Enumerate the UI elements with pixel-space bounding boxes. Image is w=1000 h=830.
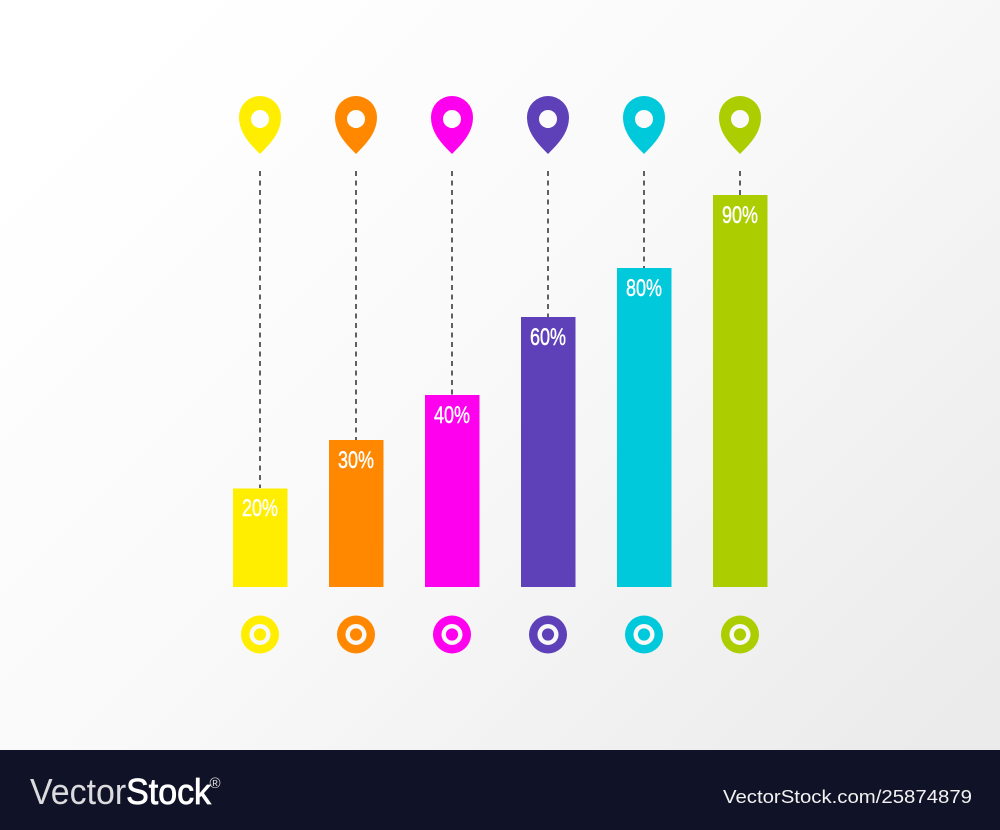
icon: green map pin (719, 96, 761, 154)
icon: purple target (529, 616, 567, 654)
bar (713, 195, 768, 587)
bar (329, 440, 384, 587)
footer image id: VectorStock.com/25874879 (723, 786, 972, 807)
bar (233, 488, 288, 587)
value label: 80% (626, 275, 662, 302)
column: 90% green (713, 96, 768, 654)
icon: purple map pin (527, 96, 569, 154)
icon: yellow map pin (239, 96, 281, 154)
bar (617, 268, 672, 587)
dashed connector (355, 171, 357, 440)
value label: 60% (530, 324, 566, 351)
value label: 30% (338, 447, 374, 474)
dashed connector (739, 171, 741, 195)
column: 80% cyan (617, 96, 672, 654)
icon: orange target (337, 616, 375, 654)
value label: 20% (242, 495, 278, 522)
bar (521, 317, 576, 587)
dashed connector (547, 171, 549, 317)
column: 40% magenta (425, 96, 480, 654)
footer band (0, 750, 1000, 830)
dashed connector (259, 171, 261, 488)
column: 30% orange (329, 96, 384, 654)
icon: cyan target (625, 616, 663, 654)
dashed connector (451, 171, 453, 395)
column: 20% yellow (233, 96, 288, 654)
value label: 40% (434, 402, 470, 429)
icon: green target (721, 616, 759, 654)
icon: orange map pin (335, 96, 377, 154)
value label: 90% (722, 202, 758, 229)
icon: cyan map pin (623, 96, 665, 154)
icon: yellow target (241, 616, 279, 654)
column: 60% purple (521, 96, 576, 654)
dashed connector (643, 171, 645, 268)
icon: magenta map pin (431, 96, 473, 154)
footer logo: VectorStock (30, 771, 212, 812)
icon: magenta target (433, 616, 471, 654)
bar (425, 395, 480, 587)
registered mark: ® (210, 775, 221, 792)
